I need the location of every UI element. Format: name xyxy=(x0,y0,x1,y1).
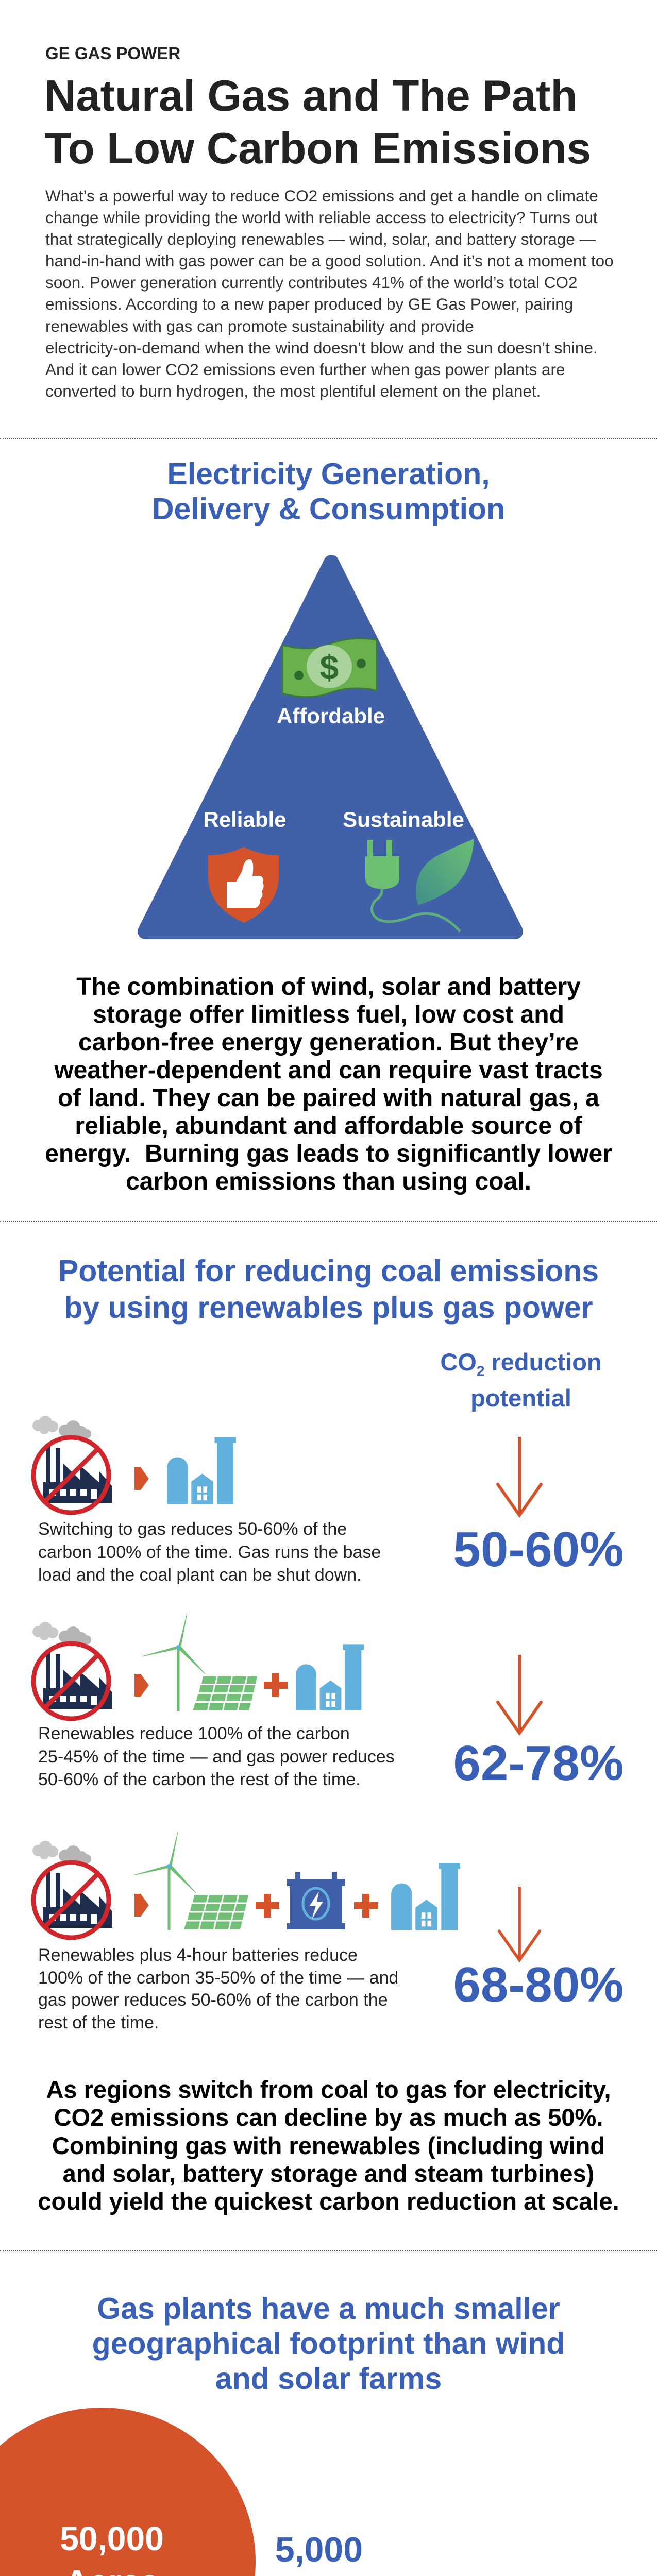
heading: electricity generation: Delivery & Consumption xyxy=(152,492,505,526)
heading: potential for reducing coal emissions: by using renewables plus gas power xyxy=(64,1291,593,1325)
row 2 value: 62-78% xyxy=(453,1736,624,1791)
heading: geographical footprint xyxy=(92,2292,565,2396)
icon: coal plant crossed xyxy=(31,1622,112,1721)
paragraph: regions switch: Combining gas with renewables (including wind xyxy=(52,2132,605,2159)
icon: shield thumbs up xyxy=(208,847,279,923)
row 1 value: 50-60% xyxy=(453,1522,624,1577)
icon: solar panel xyxy=(193,1676,257,1710)
title: Natural Gas and The Path xyxy=(44,72,577,121)
row 2 text: 50-60% of the carbon the rest of the time. xyxy=(38,1770,361,1789)
paragraph: renewables combination: energy. Burning gas leads to significantly lower xyxy=(45,1140,612,1167)
icon: money: $ xyxy=(320,648,339,686)
row 3 text xyxy=(38,1945,398,2032)
paragraph: renewables combination xyxy=(45,973,612,1195)
row 1 text: carbon 100% of the time. Gas runs the base xyxy=(38,1543,381,1562)
heading: electricity generation xyxy=(152,457,505,526)
intro paragraph: soon. Power generation currently contributes 41% of the world’s total CO2 xyxy=(45,273,577,292)
row 1 text: load and the coal plant can be shut down. xyxy=(38,1565,362,1585)
label: affordable: Affordable xyxy=(277,704,385,728)
paragraph: regions switch: As regions switch from coal to gas for electricity, xyxy=(46,2076,611,2103)
paragraph: renewables combination: The combination of wind, solar and battery xyxy=(76,973,581,1001)
column header: CO2 reduction potential: potential xyxy=(470,1384,571,1412)
intro paragraph: emissions. According to a new paper produced by GE Gas Power, pairing xyxy=(45,295,573,313)
column header: CO2 reduction potential xyxy=(440,1348,602,1412)
icon: battery xyxy=(287,1872,345,1929)
paragraph: renewables combination: carbon emissions than using coal. xyxy=(126,1168,531,1195)
row 3 text: gas power reduces 50-60% of the carbon the xyxy=(38,1990,388,2010)
icon: wind turbine xyxy=(133,1832,196,1930)
intro paragraph: change while providing the world with reliable access to electricity? Turns out xyxy=(45,208,598,227)
intro paragraph: renewables with gas can promote sustainability and provide xyxy=(45,317,474,335)
intro paragraph: And it can lower CO2 emissions even further when gas power plants are xyxy=(45,360,565,379)
triangle diagram xyxy=(138,555,523,939)
label: sustainable: Sustainable xyxy=(343,807,464,832)
row 2 text xyxy=(38,1724,395,1789)
heading: geographical footprint: Gas plants have a much smaller xyxy=(97,2292,560,2326)
row 3 value: 68-80% xyxy=(453,1957,624,2012)
icon: gas plant xyxy=(296,1644,364,1710)
paragraph: regions switch xyxy=(38,2076,619,2215)
down arrow xyxy=(498,1887,541,1963)
icon: small arrow xyxy=(134,1467,149,1490)
icon: gas plant xyxy=(391,1863,460,1930)
icon: gas plant xyxy=(167,1437,236,1504)
title xyxy=(44,72,591,173)
column header: CO2 reduction potential: CO2 reduction xyxy=(440,1348,602,1379)
icon: small arrow xyxy=(134,1674,149,1697)
icon: solar panel xyxy=(184,1895,248,1929)
paragraph: regions switch: CO2 emissions can decline by as much as 50%. xyxy=(54,2104,603,2131)
intro paragraph: electricity-on-demand when the wind doesn’t blow and the sun doesn’t shine. xyxy=(45,338,598,357)
heading: electricity generation: Electricity Generation, xyxy=(167,457,490,491)
bubble chart: land use xyxy=(0,2408,368,2576)
intro paragraph: What’s a powerful way to reduce CO2 emissions and get a handle on climate xyxy=(45,187,598,205)
icon: money xyxy=(282,638,377,697)
row 2 text: 25-45% of the time — and gas power reduces xyxy=(38,1747,395,1766)
icon: wind turbine xyxy=(142,1613,205,1711)
paragraph: regions switch: could yield the quickest carbon reduction at scale. xyxy=(38,2188,619,2215)
brand label: GE GAS POWER xyxy=(45,44,180,63)
heading: geographical footprint: geographical footprint than wind xyxy=(92,2327,565,2361)
icon: plus xyxy=(264,1673,288,1697)
icon: coal plant crossed xyxy=(31,1416,112,1515)
row 2 text: Renewables reduce 100% of the carbon xyxy=(38,1724,350,1743)
row 2: renewables plus gas xyxy=(31,1613,543,1736)
label: reliable: Reliable xyxy=(203,807,287,832)
down arrow xyxy=(496,1655,543,1736)
icon: coal plant crossed xyxy=(31,1841,112,1940)
intro paragraph: hand-in-hand with gas power can be a good solution. And it’s not a moment too xyxy=(45,251,614,270)
title: To Low Carbon Emissions xyxy=(44,124,591,173)
intro paragraph: that strategically deploying renewables — wind, solar, and battery storage — xyxy=(45,230,596,248)
heading: potential for reducing coal emissions: Potential for reducing coal emissions xyxy=(58,1254,599,1288)
row 3 text: Renewables plus 4-hour batteries reduce xyxy=(38,1945,358,1965)
row 1 text: Switching to gas reduces 50-60% of the xyxy=(38,1519,347,1539)
paragraph: renewables combination: storage offer limitless fuel, low cost and xyxy=(93,1001,564,1028)
bubble: solar: 5,000 xyxy=(275,2530,363,2569)
row 1: coal to gas xyxy=(31,1416,543,1518)
bubble: wind xyxy=(0,2408,256,2576)
icon: plus xyxy=(354,1894,378,1918)
intro paragraph: converted to burn hydrogen, the most plentiful element on the planet. xyxy=(45,382,541,400)
down arrow xyxy=(496,1437,543,1518)
intro paragraph xyxy=(45,187,614,400)
row 3 text: 100% of the carbon 35-50% of the time — and xyxy=(38,1968,398,1988)
paragraph: renewables combination: reliable, abundant and affordable source of xyxy=(75,1112,582,1140)
row 3: renewables plus batteries plus gas xyxy=(31,1832,541,1963)
paragraph: renewables combination: weather-dependent and can require vast tracts xyxy=(54,1057,603,1084)
row 3 text: rest of the time. xyxy=(38,2013,159,2032)
heading: potential for reducing coal emissions xyxy=(58,1254,599,1325)
icon: plus xyxy=(256,1894,279,1918)
row 1 text xyxy=(38,1519,381,1585)
icon: small arrow xyxy=(134,1894,149,1917)
paragraph: renewables combination: carbon-free energy generation. But they’re xyxy=(78,1029,579,1056)
icon: plug and leaf xyxy=(365,839,474,931)
heading: geographical footprint: and solar farms xyxy=(215,2362,442,2396)
bubble: wind: 50,000 xyxy=(60,2519,164,2557)
paragraph: renewables combination: of land. They can be paired with natural gas, a xyxy=(58,1084,599,1112)
paragraph: regions switch: and solar, battery storage and steam turbines) xyxy=(63,2160,594,2187)
